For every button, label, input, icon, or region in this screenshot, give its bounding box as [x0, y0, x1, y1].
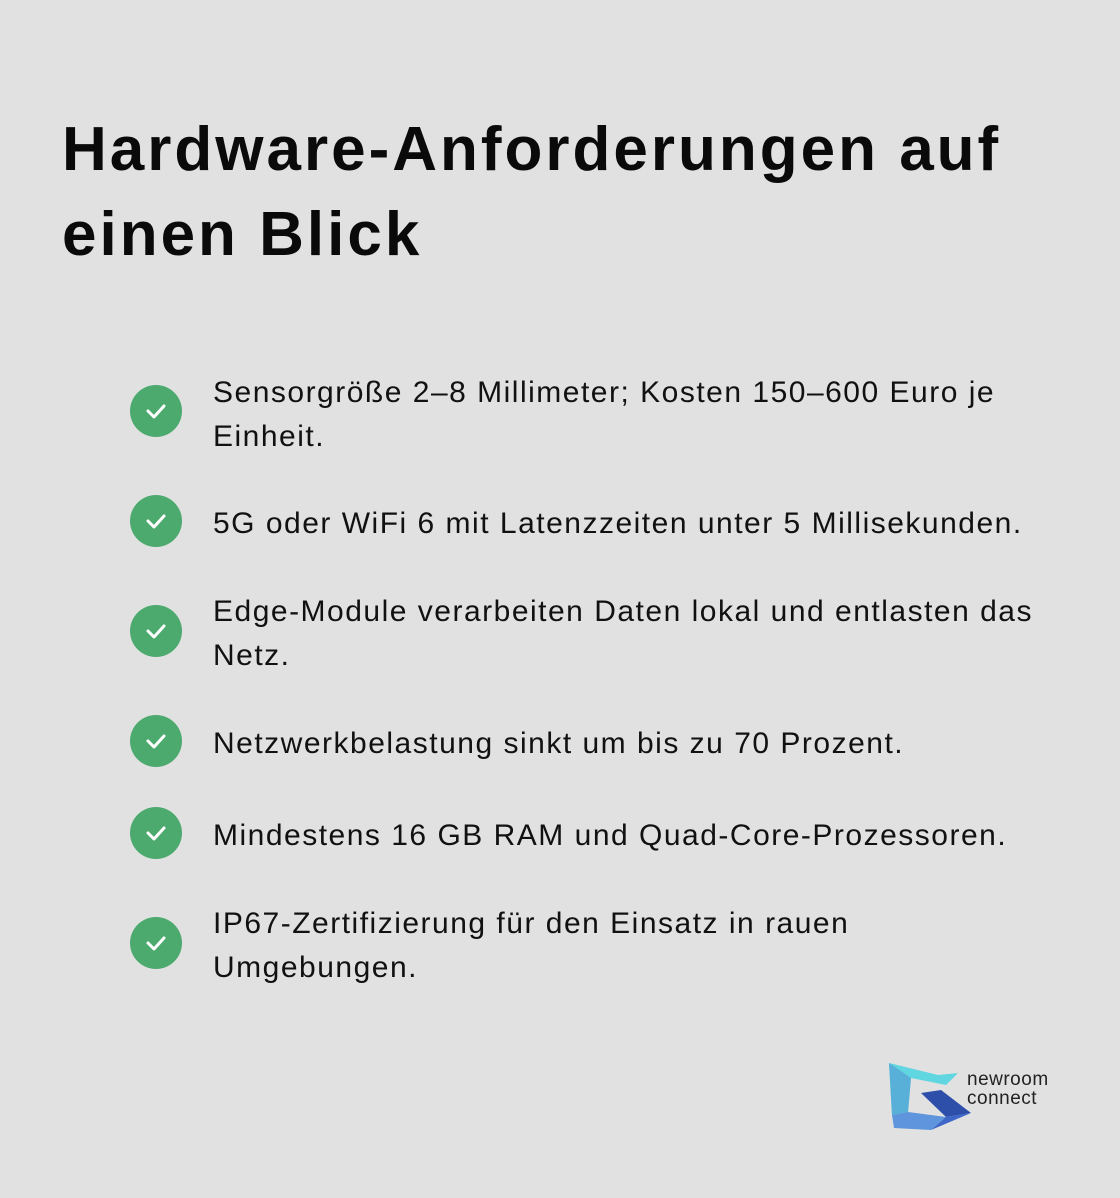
- text: IP67-Zertifizierung für den Einsatz in rauen Umgebungen.: [213, 907, 849, 984]
- text: brand name: [967, 1069, 1049, 1109]
- item 2: [130, 495, 1023, 547]
- icon: logo mark: [889, 1063, 971, 1130]
- text: 5G oder WiFi 6 mit Latenzzeiten unter 5 Millisekunden.: [213, 507, 1023, 540]
- item 1: [130, 376, 995, 453]
- icon: check: [130, 385, 182, 437]
- title: Hardware-Anforderungen auf einen Blick: [62, 115, 1001, 269]
- text: brand name: connect: [967, 1088, 1037, 1109]
- icon: check: [130, 495, 182, 547]
- text: Mindestens 16 GB RAM und Quad-Core-Prozessoren.: [213, 819, 1007, 852]
- item 5: [130, 807, 1007, 859]
- icon: check: [130, 605, 182, 657]
- text: Edge-Module verarbeiten Daten lokal und entlasten das Netz.: [213, 595, 1033, 672]
- icon: check: [130, 807, 182, 859]
- item 3: [130, 595, 1033, 672]
- text: Sensorgröße 2–8 Millimeter; Kosten 150–600 Euro je Einheit.: [213, 376, 995, 453]
- logo: [889, 1063, 1049, 1130]
- item 6: [130, 907, 849, 984]
- icon: check: [130, 917, 182, 969]
- item 4: [130, 715, 904, 767]
- text: Netzwerkbelastung sinkt um bis zu 70 Prozent.: [213, 727, 904, 760]
- icon: check: [130, 715, 182, 767]
- text: brand name: newroom: [967, 1069, 1049, 1090]
